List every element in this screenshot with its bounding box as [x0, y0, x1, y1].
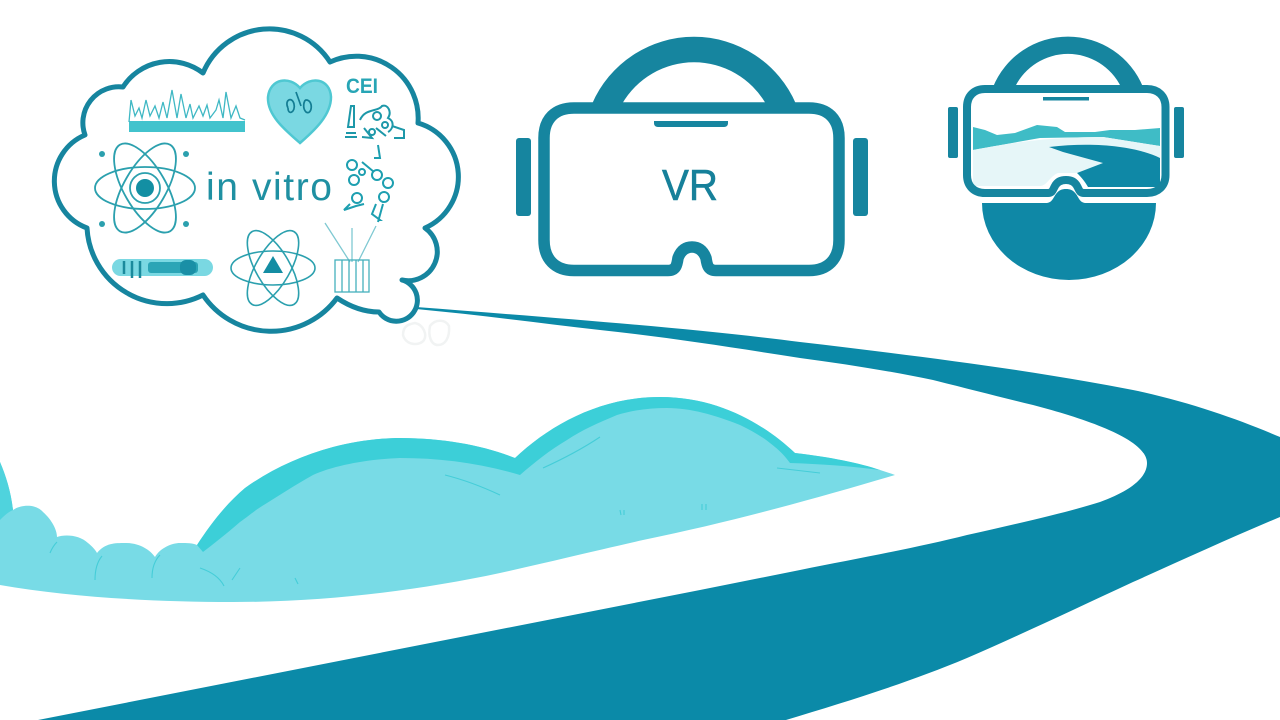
left strap: [948, 107, 958, 158]
thought cloud: [54, 29, 458, 331]
VR headset: large: [516, 37, 868, 271]
headset strap arc: [592, 37, 796, 104]
hill rim shading: [197, 397, 880, 552]
VR headset on head with river scene: [948, 37, 1184, 280]
CEI label: CEI: [346, 75, 378, 98]
top bar: [654, 121, 728, 127]
light teal hills: [0, 397, 895, 602]
VR label: VR: [662, 161, 718, 210]
road: winding dark teal path: [38, 307, 1280, 720]
icon: tissue culture strip: [129, 90, 245, 132]
hill detail strokes: [50, 437, 820, 586]
goggles frame: [967, 89, 1166, 193]
left hill rim: [0, 462, 13, 520]
right strap: [1174, 107, 1184, 158]
head strap arc: [993, 37, 1143, 87]
ghost circles below cloud tail: [403, 321, 449, 345]
river scene: [973, 125, 1160, 187]
goggles frame: [544, 108, 839, 270]
in vitro label: in vitro: [206, 166, 332, 209]
icon: cell doodles lower: [344, 145, 393, 222]
right strap: [853, 138, 868, 216]
icon: beaker with rods: [325, 223, 376, 292]
icon: heart: [268, 81, 331, 143]
top bar: [1043, 97, 1089, 100]
icon: cell doodles upper: [345, 106, 404, 138]
icon: large atom: [95, 134, 195, 242]
icon: pill capsule: [112, 259, 213, 278]
head: [982, 189, 1156, 280]
left strap: [516, 138, 531, 216]
icon: small atom with flask: [231, 223, 315, 313]
